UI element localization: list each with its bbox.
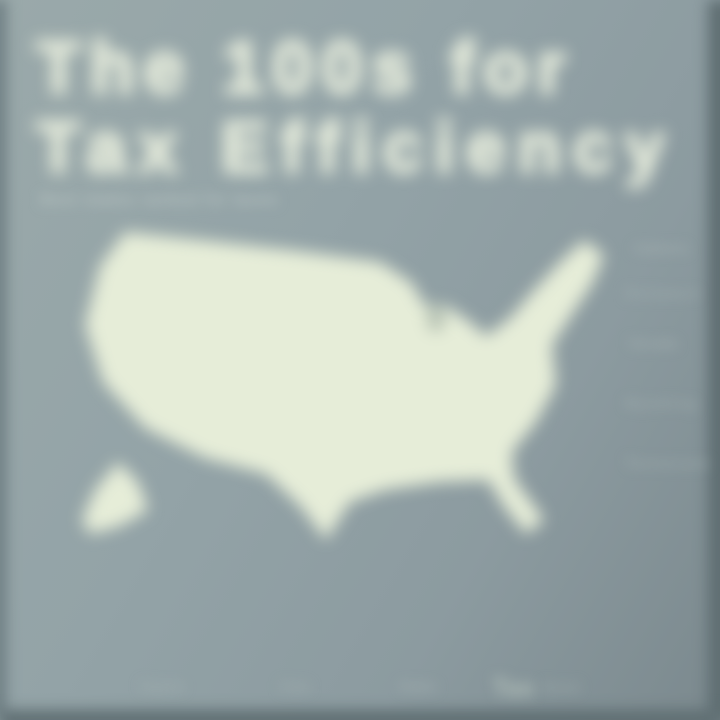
side label five: Tennessee — [625, 455, 711, 471]
left edge shade — [0, 0, 6, 720]
Alaska — [82, 462, 148, 534]
title line two: Tax Efficiency — [36, 108, 676, 188]
footer label two: Data — [280, 678, 310, 694]
subtitle: Best states ranked for taxes — [40, 190, 279, 209]
side label two: Delaware — [625, 285, 700, 301]
right edge shade — [708, 0, 720, 720]
side label one: Alabama — [633, 240, 688, 256]
contiguous states — [85, 232, 604, 540]
footer brand: Tax — [492, 672, 535, 702]
footer label one: Source — [140, 678, 184, 694]
side legend labels — [625, 230, 715, 480]
side label four: Wyoming — [625, 395, 697, 411]
footer brand text: Brand — [542, 679, 579, 695]
footer label three: Notes — [400, 678, 437, 694]
footer labels — [140, 672, 579, 702]
bottom edge shade — [0, 710, 720, 720]
great lakes notch — [427, 304, 445, 332]
side label three: Nevada — [629, 335, 677, 351]
title line one: The 100s for — [36, 26, 574, 109]
